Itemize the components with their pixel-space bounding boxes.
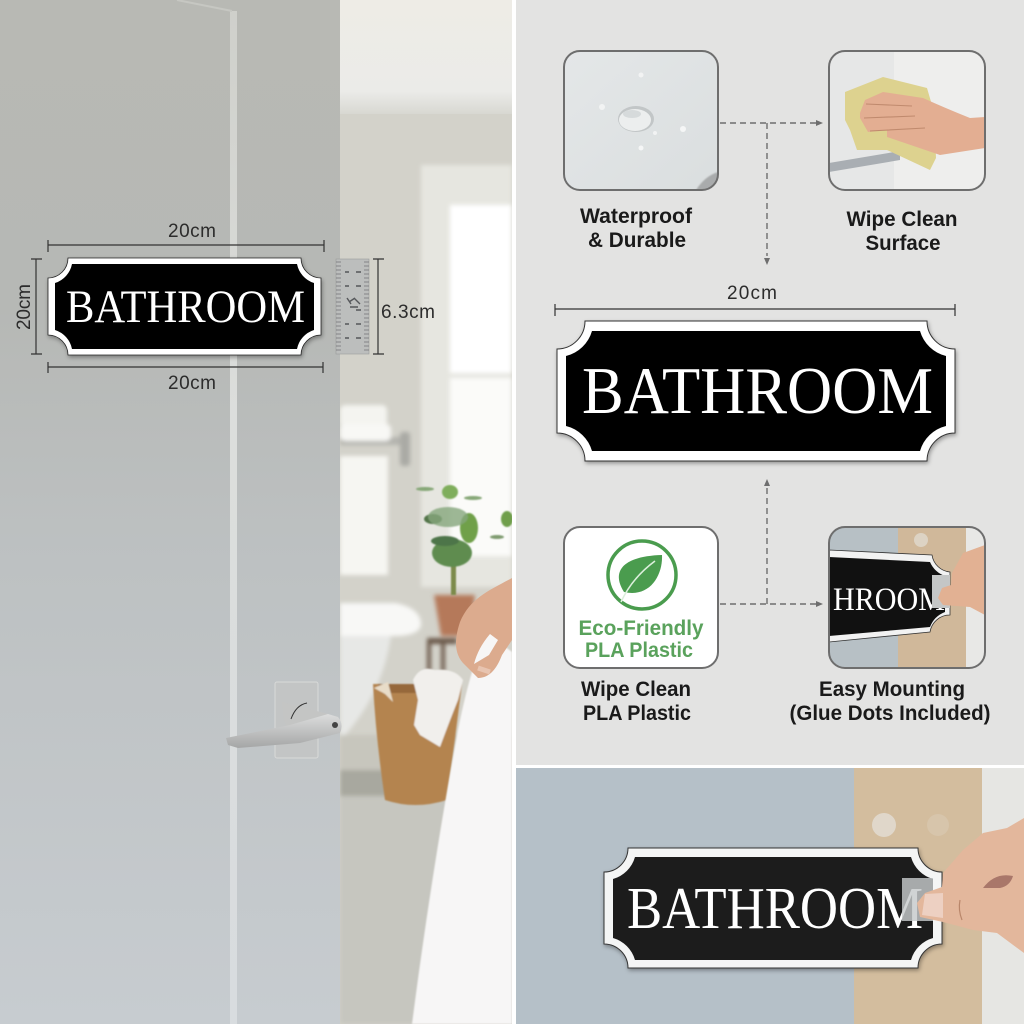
icon: leaf xyxy=(608,541,676,609)
label: easy mounting xyxy=(790,678,990,725)
hand xyxy=(860,92,985,155)
card: waterproof xyxy=(564,51,718,190)
sign: bottom BATHROOM xyxy=(604,848,942,968)
dimension right: 6.3cm xyxy=(381,302,435,323)
towel held by hand xyxy=(412,578,512,1024)
panel: mounting photo xyxy=(516,768,1024,1024)
divider xyxy=(516,765,1024,768)
dimension top: 20cm xyxy=(168,221,216,242)
label: wipe clean surface xyxy=(846,208,958,255)
card: easy mounting xyxy=(829,527,985,668)
glue dots xyxy=(872,813,949,837)
arrows top xyxy=(720,120,823,265)
card: eco-friendly: PLA Plastic xyxy=(585,639,693,662)
dimension left xyxy=(14,259,42,354)
dimension top xyxy=(48,221,324,252)
sign: large BATHROOM: BATHROOM xyxy=(582,354,933,428)
label: wipe clean PLA plastic xyxy=(581,678,691,725)
card: eco-friendly: Eco-Friendly xyxy=(578,617,704,640)
sign: small BATHROOM: BATHROOM xyxy=(66,281,305,333)
label: waterproof: Waterproof xyxy=(580,205,693,228)
panel: bathroom background scene xyxy=(340,0,513,1024)
panel: door xyxy=(0,0,342,1024)
card: eco-friendly xyxy=(564,527,718,668)
card: wipe clean xyxy=(829,51,985,190)
arrows bottom xyxy=(720,479,823,607)
label: waterproof xyxy=(580,205,693,252)
ruler xyxy=(336,259,369,354)
card: easy mounting: HROOM xyxy=(833,582,945,618)
label: easy mounting: (Glue Dots Included) xyxy=(790,702,990,725)
divider xyxy=(512,0,516,1024)
dimension bottom: 20cm xyxy=(168,373,216,394)
sign: bottom BATHROOM: BATHROOM xyxy=(627,875,923,941)
sign: large BATHROOM xyxy=(557,321,955,461)
sign: small BATHROOM xyxy=(48,258,321,355)
dimension: large sign: 20cm xyxy=(727,283,777,304)
label: wipe clean surface: Surface xyxy=(866,232,940,255)
hand xyxy=(917,818,1024,953)
icon: blurred plant xyxy=(416,485,513,595)
basket with white cloth xyxy=(373,669,463,805)
door handle xyxy=(226,682,342,758)
label: wipe clean PLA plastic: Wipe Clean xyxy=(581,678,691,701)
dimension bottom xyxy=(48,362,323,394)
panel: features xyxy=(516,0,1024,765)
small sign with dimensions xyxy=(14,221,435,394)
label: wipe clean PLA plastic: PLA Plastic xyxy=(583,702,691,725)
cloth xyxy=(845,77,936,170)
dimension right xyxy=(373,259,435,354)
dimension left: 20cm xyxy=(14,284,35,330)
label: waterproof: & Durable xyxy=(588,229,686,252)
glue tab xyxy=(902,878,933,921)
icon: water drop xyxy=(599,72,686,150)
hand xyxy=(938,545,985,615)
label: easy mounting: Easy Mounting xyxy=(819,678,965,701)
dimension: large sign xyxy=(555,283,955,316)
label: wipe clean surface: Wipe Clean xyxy=(846,208,958,231)
